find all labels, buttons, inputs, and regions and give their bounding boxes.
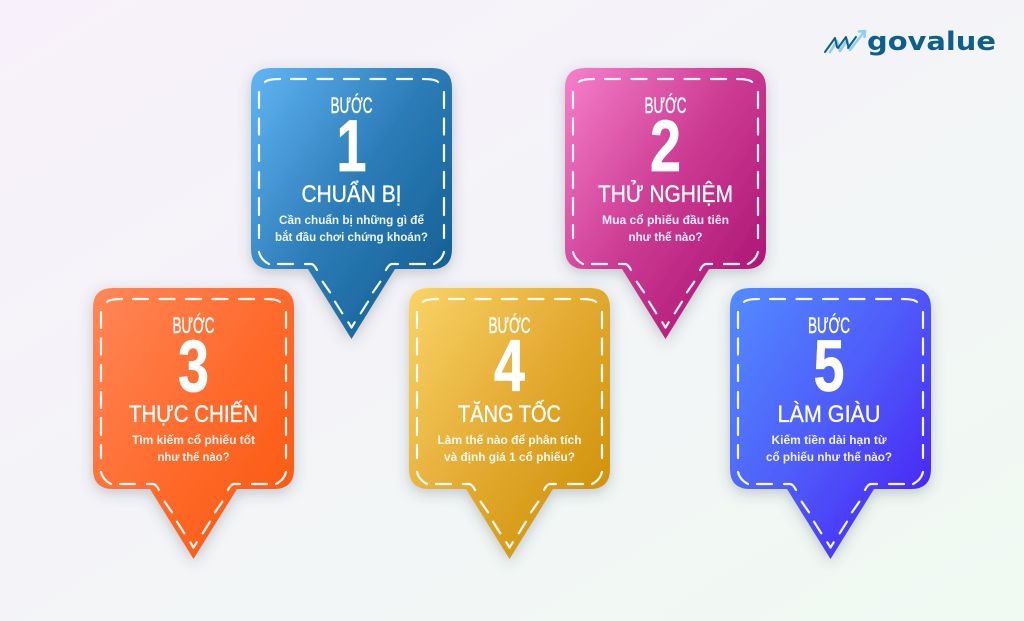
heading: CHUẨN BỊ bbox=[302, 180, 402, 208]
question text: như thế nào? bbox=[628, 232, 702, 244]
question text: Kiếm tiền dài hạn từ bbox=[772, 435, 887, 447]
heading: TĂNG TỐC bbox=[458, 400, 561, 428]
question text: Tìm kiếm cổ phiếu tốt bbox=[132, 435, 255, 447]
heading: THỰC CHIẾN bbox=[129, 400, 258, 428]
panel: step 3 bbox=[93, 288, 294, 559]
heading: LÀM GIÀU bbox=[778, 401, 880, 428]
pin shape bbox=[565, 68, 766, 339]
panel: step 1 bbox=[251, 68, 452, 339]
question text: Làm thế nào để phân tích bbox=[438, 435, 582, 447]
question text: cổ phiếu như thế nào? bbox=[766, 452, 892, 464]
label: Bước: BƯỚC bbox=[330, 93, 373, 118]
question text: và định giá 1 cổ phiếu? bbox=[444, 452, 575, 464]
question text bbox=[602, 215, 729, 244]
number 5: 5 bbox=[814, 326, 844, 407]
heading: THỬ NGHIỆM bbox=[598, 179, 733, 208]
pin shape bbox=[93, 288, 294, 559]
panel: step 5 bbox=[730, 288, 931, 559]
label: Bước: BƯỚC bbox=[172, 313, 215, 338]
label: Bước: BƯỚC bbox=[644, 93, 687, 118]
panel: step 2 bbox=[565, 68, 766, 339]
question text bbox=[766, 435, 892, 464]
number 3: 3 bbox=[178, 326, 209, 407]
number 4: 4 bbox=[494, 326, 525, 407]
number 1: 1 bbox=[336, 106, 366, 187]
stitched border bbox=[259, 79, 444, 328]
pin shape bbox=[251, 68, 452, 339]
label: Bước: BƯỚC bbox=[488, 313, 531, 338]
pin shape bbox=[409, 288, 610, 559]
icon: rising chart arrows bbox=[825, 31, 865, 52]
question text: Cần chuẩn bị những gì để bbox=[279, 215, 425, 227]
question text: bắt đầu chơi chứng khoán? bbox=[275, 231, 428, 244]
question text bbox=[438, 435, 582, 464]
pin shape bbox=[730, 288, 931, 559]
stitched border bbox=[573, 79, 758, 328]
logo wordmark: govalue bbox=[867, 27, 996, 57]
question text: Mua cổ phiếu đầu tiên bbox=[602, 215, 729, 227]
panel: step 4 bbox=[409, 288, 610, 559]
logo: govalue bbox=[825, 27, 996, 57]
stitched border bbox=[101, 299, 286, 548]
number 2: 2 bbox=[650, 106, 681, 187]
question text bbox=[132, 435, 255, 464]
question text: như thế nào? bbox=[158, 452, 230, 464]
stitched border bbox=[738, 299, 923, 548]
stitched border bbox=[417, 299, 602, 548]
question text bbox=[275, 215, 428, 244]
label: Bước: BƯỚC bbox=[808, 313, 850, 338]
